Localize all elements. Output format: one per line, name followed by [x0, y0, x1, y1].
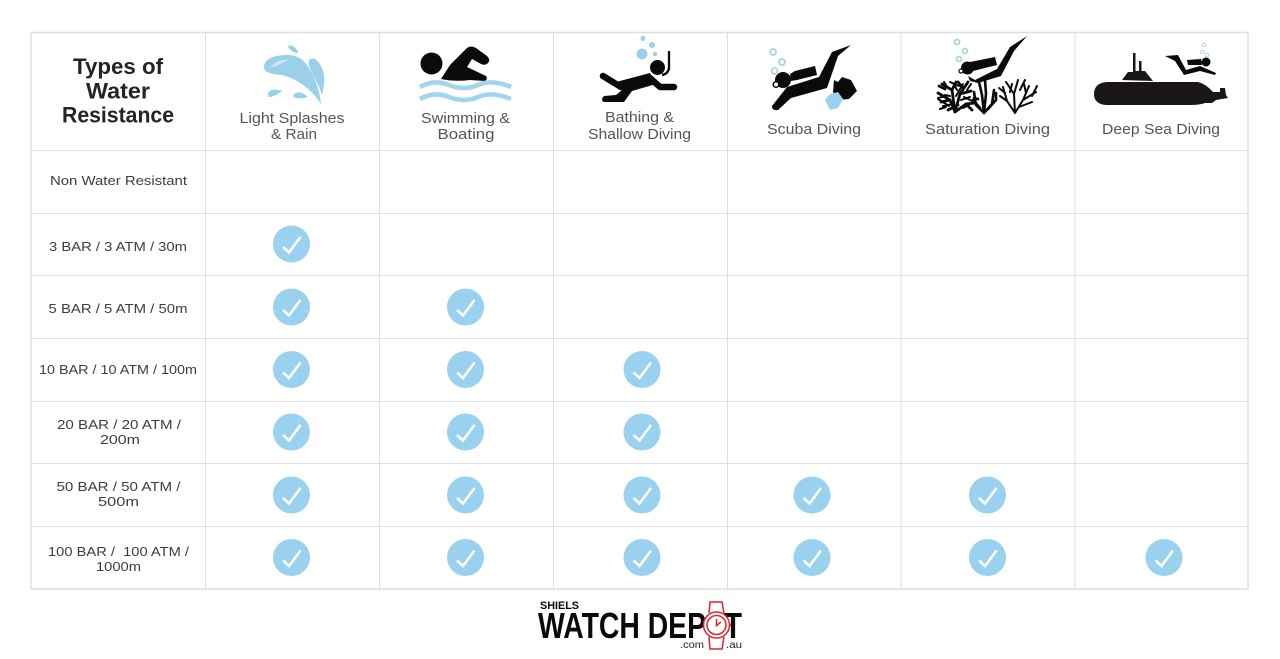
column: light splashes and rain	[240, 45, 344, 143]
column: saturation diving: Saturation Diving	[925, 122, 1050, 138]
column: deep sea diving: Deep Sea Diving	[1102, 122, 1220, 138]
row: 10 bar: 10 BAR / 10 ATM / 100m	[39, 362, 197, 377]
logo: Shiels Watch Depot: SHIELS	[540, 600, 579, 612]
column: bathing and shallow diving: Shallow Diving	[588, 127, 691, 143]
column: swimming and boating: Swimming &	[421, 111, 510, 127]
title: Water	[86, 78, 150, 104]
row: 100 bar	[48, 539, 1182, 576]
row: 100 bar: 1000m	[96, 559, 141, 574]
column: deep sea diving	[1094, 43, 1228, 138]
logo: Shiels Watch Depot: .com	[680, 640, 704, 651]
title	[62, 54, 174, 128]
row: 20 bar: 20 BAR / 20 ATM /	[57, 417, 181, 432]
row: 5 bar: 5 BAR / 5 ATM / 50m	[48, 301, 188, 316]
icon: water splash	[264, 45, 324, 104]
title: Resistance	[62, 102, 174, 128]
column: bathing and shallow diving	[588, 36, 691, 143]
column: saturation diving	[925, 36, 1050, 138]
logo: Shiels Watch Depot: .au	[726, 640, 742, 651]
icon: red watch	[704, 602, 730, 649]
column: bathing and shallow diving: Bathing &	[605, 110, 674, 126]
row: 10 bar	[39, 351, 660, 388]
row: 20 bar	[57, 414, 660, 450]
row: 100 bar: 100 BAR / 100 ATM /	[48, 544, 189, 559]
logo: Shiels Watch Depot: WATCH DEP	[538, 605, 706, 646]
logo: Shiels Watch Depot: T	[724, 605, 742, 646]
icon: submarine and diver	[1094, 43, 1228, 105]
column: light splashes and rain: & Rain	[271, 127, 317, 143]
icon: swimmer	[420, 46, 511, 100]
row: 3 bar	[49, 226, 310, 262]
icon: snorkeler	[602, 36, 674, 102]
column: swimming and boating: Boating	[438, 127, 494, 143]
icon: diver above coral	[938, 36, 1037, 113]
icon: scuba diver and fish	[770, 45, 857, 110]
column: light splashes and rain: Light Splashes	[240, 111, 344, 127]
column: swimming and boating	[420, 46, 511, 143]
row: 20 bar: 200m	[100, 432, 140, 447]
row: 50 bar: 50 BAR / 50 ATM /	[56, 479, 181, 494]
row: 5 bar	[48, 288, 484, 326]
column: scuba diving	[767, 45, 861, 138]
column: scuba diving: Scuba Diving	[767, 122, 861, 138]
row label: non water resistant: Non Water Resistant	[50, 173, 187, 188]
row: 50 bar: 500m	[98, 494, 139, 509]
coral	[938, 80, 1037, 113]
row: 3 bar: 3 BAR / 3 ATM / 30m	[49, 239, 187, 254]
title: Types of	[73, 54, 164, 79]
row: 50 bar	[56, 476, 1006, 514]
